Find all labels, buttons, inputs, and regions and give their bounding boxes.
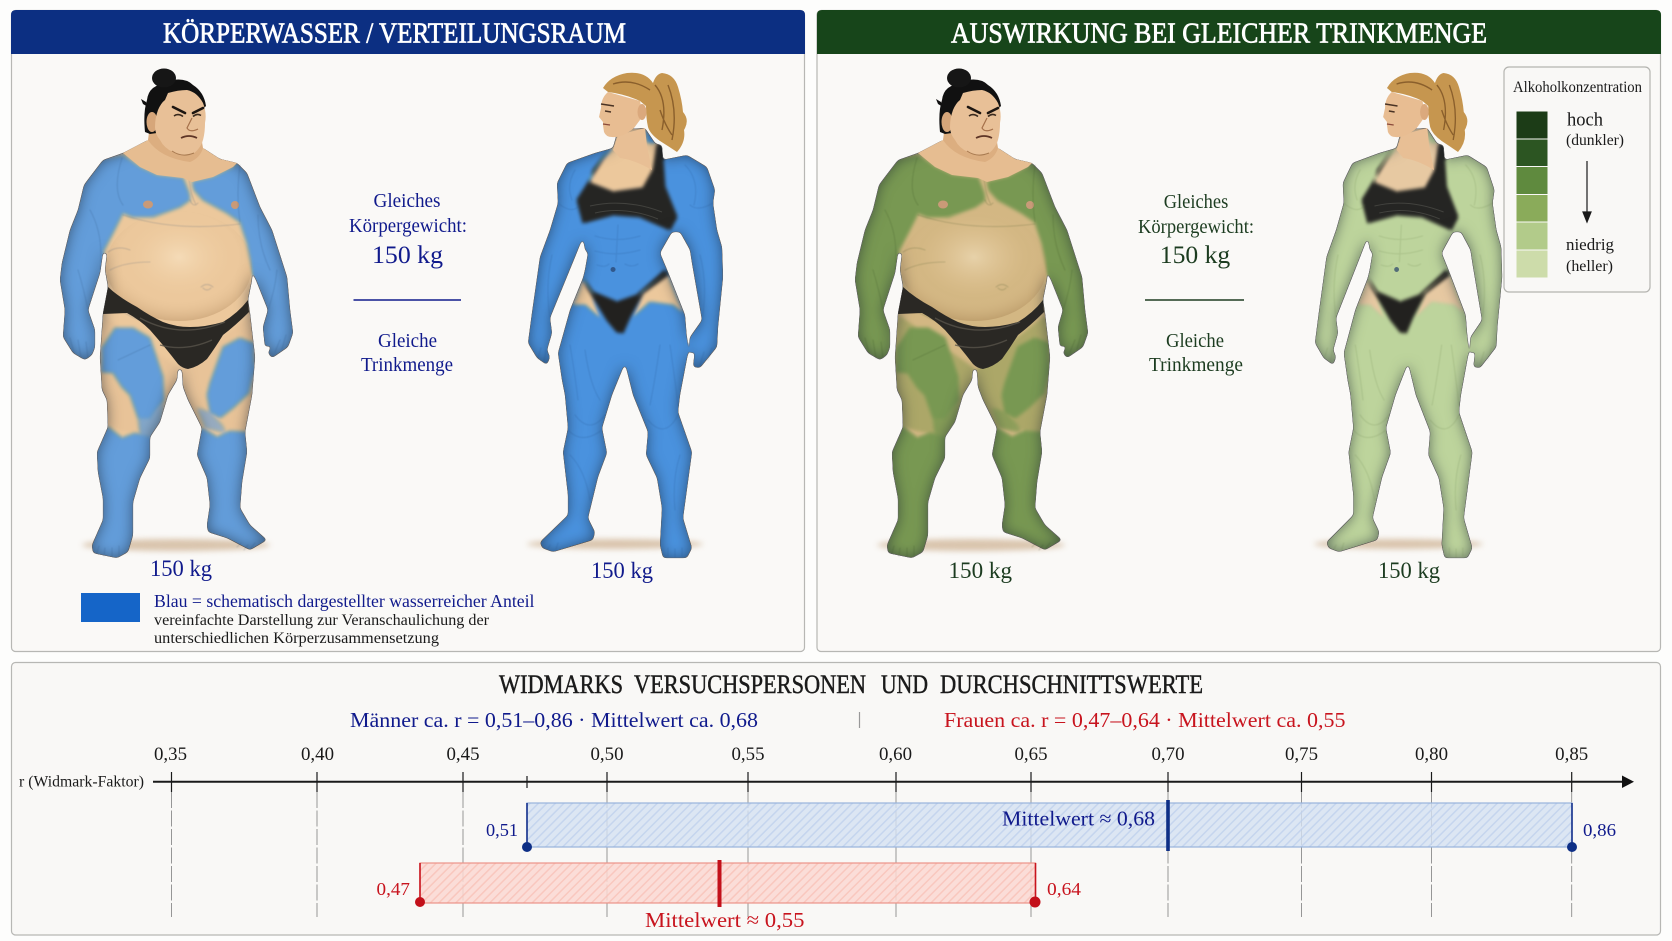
subtitle: Männer: Männer ca. r = 0,51–0,86 · Mittelwert ca. 0,68 xyxy=(350,708,758,732)
axis: r Widmark-Faktor: 0,70 xyxy=(1152,745,1184,765)
text: gleiches Körpergewicht: Gleiches xyxy=(374,190,441,212)
axis: r Widmark-Faktor: 0,35 xyxy=(154,745,187,765)
figure: muscular woman blue xyxy=(527,73,723,558)
heading: DURCHSCHNITTSWERTE xyxy=(940,670,1203,699)
axis: r Widmark-Faktor: 0,75 xyxy=(1285,745,1318,765)
range bar: men: 0,51 xyxy=(486,820,518,840)
range bar: men xyxy=(486,800,1616,852)
figure: sumo man blue xyxy=(60,68,293,558)
legend: Alkoholkonzentration: hoch xyxy=(1567,110,1603,130)
subtitle: Frauen: Frauen ca. r = 0,47–0,64 · Mittelwert ca. 0,55 xyxy=(944,708,1346,732)
axis: r Widmark-Faktor xyxy=(19,745,1634,792)
heading: Körperwasser: KÖRPERWASSER / VERTEILUNGSRAUM xyxy=(163,18,626,50)
range bar: women xyxy=(376,860,1081,932)
legend: Alkoholkonzentration: niedrig xyxy=(1566,235,1614,254)
legend: blue swatch xyxy=(81,593,140,622)
text: gleiches Körpergewicht: Gleiches xyxy=(1164,191,1228,213)
axis: r Widmark-Faktor: 0,40 xyxy=(301,745,334,765)
label: 150 kg woman: 150 kg xyxy=(1378,558,1440,583)
legend: Alkoholkonzentration: (heller) xyxy=(1566,258,1613,275)
range bar: women: 0,64 xyxy=(1047,879,1081,899)
legend text: vereinfachte Darstellung zur Veranschaulichung der xyxy=(154,612,490,629)
heading: UND xyxy=(881,670,928,699)
divider line xyxy=(1145,299,1244,301)
panel: Auswirkung bei gleicher Trinkmenge xyxy=(817,10,1661,652)
text: gleiche Trinkmenge: Trinkmenge xyxy=(361,354,453,376)
heading: WIDMARKS xyxy=(499,670,623,699)
axis: r Widmark-Faktor: 0,55 xyxy=(732,745,764,765)
axis: r Widmark-Faktor: 0,50 xyxy=(590,745,624,765)
range bar: women: 0,47 xyxy=(376,879,410,899)
label: 150 kg man: 150 kg xyxy=(948,558,1013,583)
legend text xyxy=(154,591,535,647)
axis: r Widmark-Faktor: r (Widmark-Faktor) xyxy=(19,774,144,790)
axis: r Widmark-Faktor: 0,85 xyxy=(1555,745,1588,765)
figure: sumo man green xyxy=(855,68,1088,558)
panel: Körperwasser / Verteilungsraum xyxy=(11,10,805,652)
colour scale swatches xyxy=(1516,112,1548,278)
legend: Alkoholkonzentration xyxy=(1504,67,1650,292)
range bar: women: Mittelwert ≈ 0,55 xyxy=(645,908,804,932)
divider line xyxy=(354,299,461,301)
heading bar: green xyxy=(817,10,1661,54)
text: gleiches Körpergewicht: 150 kg xyxy=(372,240,443,269)
range bar: men: Mittelwert ≈ 0,68 xyxy=(1002,806,1155,830)
text: gleiches Körpergewicht: Körpergewicht: xyxy=(349,215,467,237)
axis: r Widmark-Faktor: 0,60 xyxy=(879,745,912,765)
legend: Alkoholkonzentration: (dunkler) xyxy=(1566,132,1624,149)
text: gleiches Körpergewicht: Körpergewicht: xyxy=(1138,216,1254,238)
axis: r Widmark-Faktor: 0,45 xyxy=(446,745,480,765)
panel: Widmarks Versuchspersonen xyxy=(12,662,1660,935)
heading xyxy=(499,670,1203,699)
range bar: men: 0,86 xyxy=(1583,820,1616,840)
heading: Auswirkung: AUSWIRKUNG BEI GLEICHER TRINKMENGE xyxy=(951,18,1487,50)
legend text: unterschiedlichen Körperzusammensetzung xyxy=(154,630,439,647)
text: gleiches Körpergewicht xyxy=(349,190,467,269)
label: 150 kg man: 150 kg xyxy=(150,556,212,581)
text: gleiches Körpergewicht xyxy=(1138,191,1254,269)
figure: muscular woman light green xyxy=(1314,73,1502,558)
heading: VERSUCHSPERSONEN xyxy=(634,670,866,699)
arrow: high to low xyxy=(1583,161,1591,222)
label: 150 kg woman: 150 kg xyxy=(591,558,653,583)
text: gleiche Trinkmenge: Gleiche xyxy=(378,330,437,352)
axis: r Widmark-Faktor: 0,80 xyxy=(1415,745,1448,765)
text: gleiche Trinkmenge: Gleiche xyxy=(1166,330,1224,352)
text: gleiches Körpergewicht: 150 kg xyxy=(1160,240,1231,269)
axis: r Widmark-Faktor: 0,65 xyxy=(1014,745,1048,765)
legend: Alkoholkonzentration: Alkoholkonzentration xyxy=(1513,79,1642,96)
heading bar: blue xyxy=(11,10,805,54)
text: gleiche Trinkmenge: Trinkmenge xyxy=(1149,354,1243,376)
legend text: Blau = schematisch dargestellter wasserreicher Anteil xyxy=(154,591,535,611)
text: gleiche Trinkmenge xyxy=(361,330,453,376)
text: gleiche Trinkmenge xyxy=(1149,330,1243,376)
